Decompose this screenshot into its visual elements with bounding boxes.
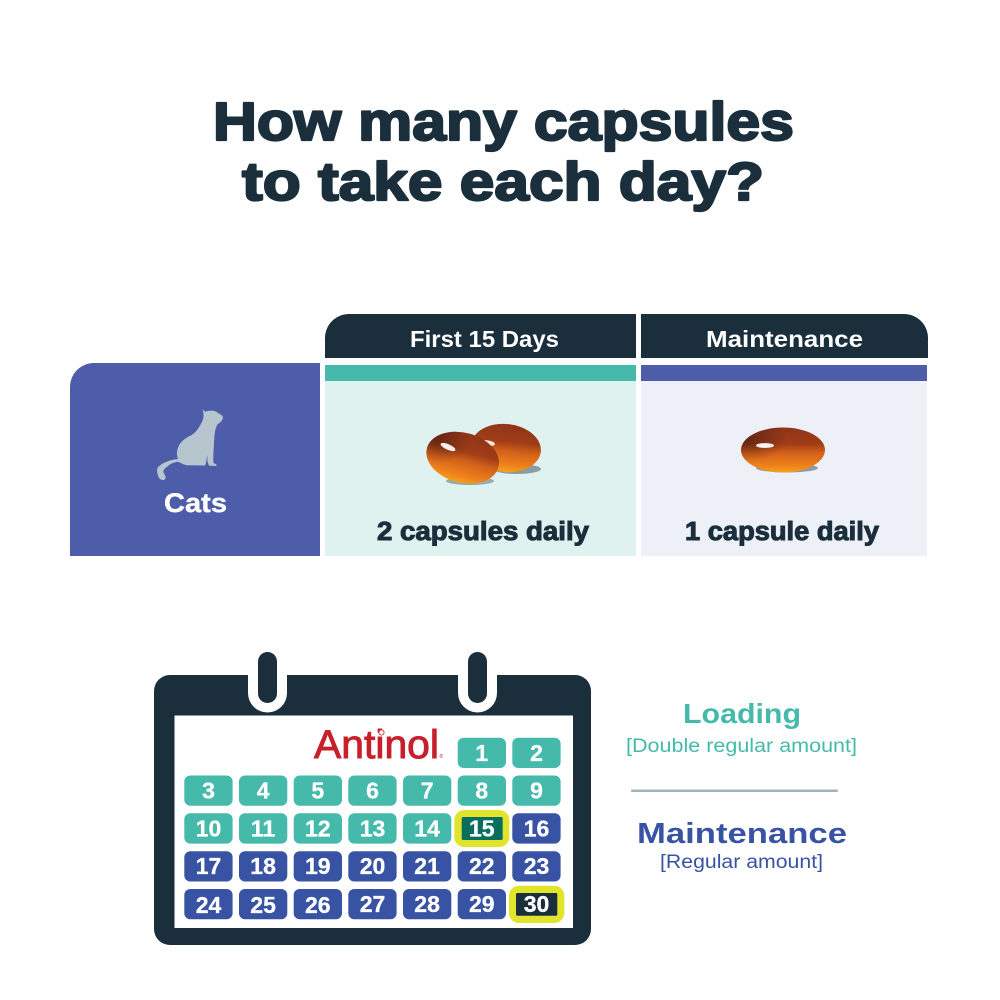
calendar ring right [458, 652, 497, 713]
dose label: 2 capsules daily [377, 518, 590, 546]
calendar day cells: 18 [250, 853, 276, 879]
table header: First 15 Days: First 15 Days [410, 326, 559, 352]
calendar day cells: 12 [305, 815, 331, 841]
calendar day cells: 7 [421, 778, 433, 804]
logo: Antinol: Antinol [314, 723, 439, 767]
calendar day cells: 8 [475, 778, 488, 804]
icon: one capsule [741, 428, 825, 472]
panel: maintenance dose [641, 365, 927, 556]
calendar day cells: 9 [530, 778, 543, 804]
title [213, 92, 794, 212]
calendar day cells: 10 [196, 815, 221, 841]
panel: cats [70, 363, 320, 556]
calendar ring left [248, 652, 287, 713]
legend: loading: Loading [683, 698, 801, 729]
calendar day cells: 30 [524, 891, 549, 917]
panel label: Cats [164, 488, 227, 518]
calendar day cells: 29 [469, 891, 495, 917]
calendar day cells: 26 [305, 892, 331, 918]
calendar day cells: 25 [250, 892, 276, 918]
calendar day cells: 11 [251, 815, 275, 841]
legend: maintenance: [Regular amount] [660, 852, 823, 873]
calendar day cells: 19 [305, 853, 331, 879]
calendar day cells: 16 [524, 815, 549, 841]
table header: First 15 Days [325, 314, 636, 358]
title: to take each day? [242, 152, 764, 212]
icon: cat silhouette [157, 409, 223, 480]
legend: maintenance: Maintenance [637, 818, 847, 850]
calendar day cells: 15 [469, 815, 495, 841]
logo: Antinol: ® [440, 753, 444, 760]
calendar day cells [184, 738, 564, 923]
calendar day cells: 6 [366, 778, 379, 804]
calendar day cells: 5 [311, 778, 324, 804]
calendar day cells: 17 [196, 853, 221, 879]
calendar day cells: 14 [414, 815, 440, 841]
panel: first 15 days dose [325, 365, 636, 556]
legend: loading: [Double regular amount] [626, 736, 857, 757]
calendar [154, 652, 591, 945]
calendar day cells: 13 [360, 815, 385, 841]
calendar day cells: 4 [257, 778, 270, 804]
legend: maintenance [637, 818, 847, 873]
calendar day cells: 3 [202, 778, 215, 804]
table header: Maintenance [641, 314, 928, 358]
dose label: 1 capsule daily [685, 518, 880, 546]
calendar day cells: 20 [360, 853, 385, 879]
calendar day cells: 21 [414, 853, 440, 879]
calendar day cells: 23 [524, 853, 549, 879]
calendar day cells: 2 [530, 740, 543, 766]
legend: loading [626, 698, 857, 757]
icon: two capsules [420, 420, 543, 491]
calendar day cells: 27 [360, 891, 385, 917]
calendar day cells: 28 [414, 891, 440, 917]
calendar day cells: 24 [196, 892, 221, 918]
table header: Maintenance: Maintenance [706, 326, 863, 352]
title: How many capsules [213, 92, 794, 152]
calendar day cells: 22 [469, 853, 495, 879]
calendar day cells: 1 [475, 740, 488, 766]
